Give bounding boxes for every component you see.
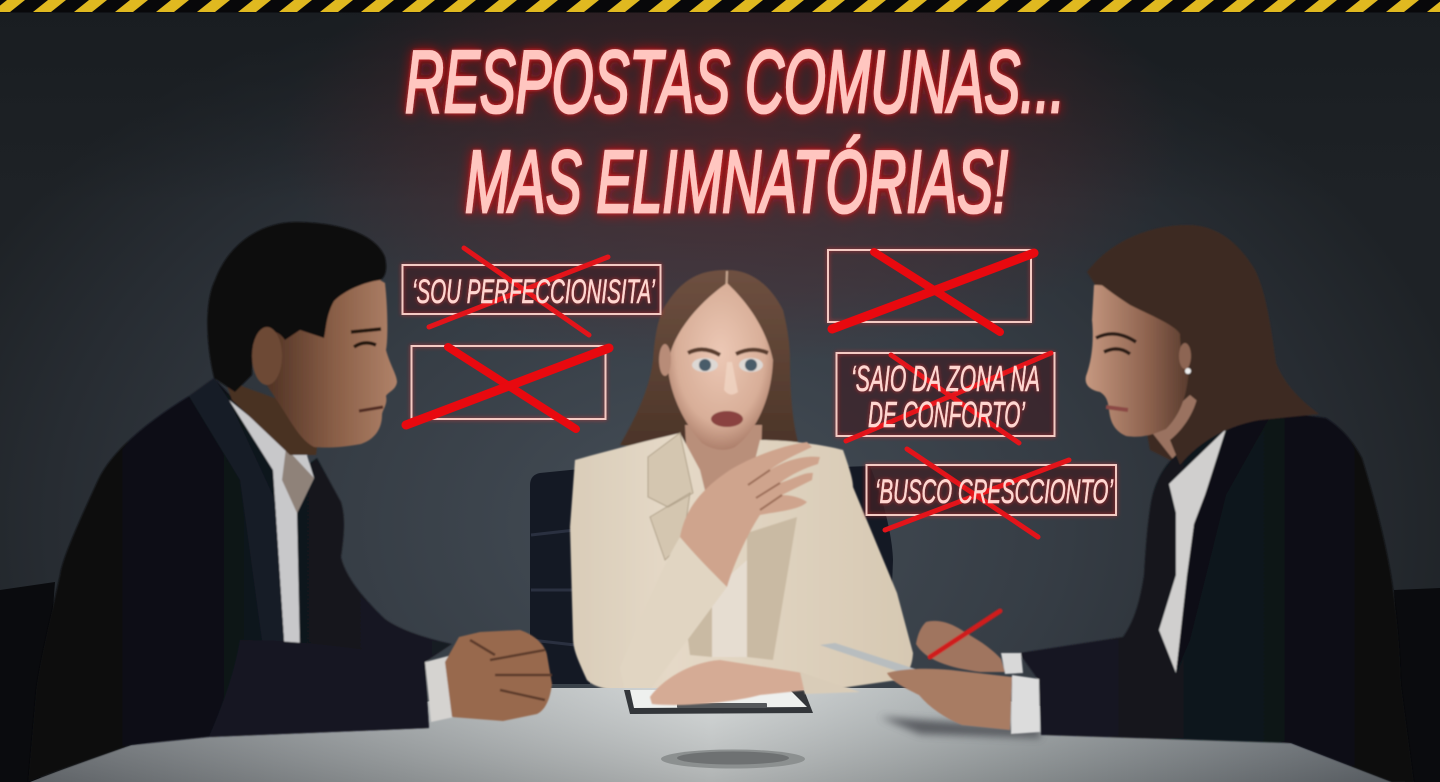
left panel shade [683, 600, 712, 657]
ear [252, 327, 282, 385]
title line 2: MAS ELIMNATÓRIAS! [465, 132, 1008, 231]
tablet [820, 643, 940, 683]
lips [1106, 407, 1128, 410]
side chairs [0, 582, 1440, 782]
lower hand and sleeve on clipboard [650, 660, 860, 705]
collar shadow [282, 448, 314, 513]
face [260, 271, 397, 448]
jacket front panel shade [747, 517, 797, 660]
box: sou perfeccionisita: ‘SOU PERFECCIONISITA’ [412, 273, 655, 311]
lapel [1176, 411, 1273, 673]
lapel [189, 378, 285, 655]
hair back [1087, 225, 1319, 465]
box: crossed-out empty 1 [406, 346, 609, 429]
jacket [28, 378, 452, 782]
title [405, 32, 1065, 231]
lower hand [887, 669, 1012, 730]
nose [724, 362, 738, 395]
clasped hands [445, 630, 552, 721]
box: busco crescimento: ‘BUSCO CRESCCIONTO’ [875, 473, 1113, 511]
neck [225, 380, 318, 455]
eyes and brows [688, 349, 768, 372]
jacket [570, 433, 913, 693]
jacket [1019, 411, 1414, 782]
eye and brow [1096, 334, 1136, 354]
face [668, 283, 773, 450]
clipboard [624, 690, 813, 714]
mouth [711, 411, 743, 427]
hair [207, 222, 386, 392]
box: saio da zona: DE CONFORTO’ [868, 394, 1026, 435]
cuff [425, 655, 454, 722]
box: busco crescimento [866, 449, 1116, 537]
raised forearm sleeve [620, 537, 727, 690]
lapels [648, 433, 693, 560]
shirt [1159, 429, 1226, 673]
table centre disc [661, 750, 805, 768]
neck [685, 425, 762, 530]
hair parting [726, 271, 727, 300]
person: left interviewer [28, 222, 552, 782]
mouth [359, 407, 383, 411]
hazard tape stripe [0, 0, 1440, 12]
red pen [930, 611, 1000, 657]
rejected answers [402, 248, 1116, 537]
ear and earring [1179, 343, 1191, 374]
box: saio da zona [836, 353, 1054, 443]
person: right interviewer [820, 225, 1414, 782]
box: crossed-out empty 2 [828, 250, 1034, 332]
shirt [229, 400, 314, 655]
person: center candidate [570, 270, 913, 693]
eye and brow [351, 329, 381, 347]
upper hand [916, 621, 1005, 672]
center chair [530, 466, 893, 684]
table shadow [880, 717, 1040, 738]
long hair [620, 270, 798, 452]
table [30, 688, 1392, 782]
raised hand [680, 442, 820, 587]
face [1086, 285, 1190, 437]
inner shirt [710, 560, 747, 657]
hair front [1087, 225, 1319, 465]
sleeve [209, 640, 429, 737]
ear [659, 344, 671, 376]
box: sou perfeccionisita [402, 248, 660, 335]
lower cuff [1011, 675, 1040, 734]
box: saio da zona: ‘SAIO DA ZONA NA [851, 358, 1040, 399]
finger lines [748, 470, 782, 510]
upper cuff [1001, 653, 1023, 674]
neck [1150, 395, 1230, 470]
